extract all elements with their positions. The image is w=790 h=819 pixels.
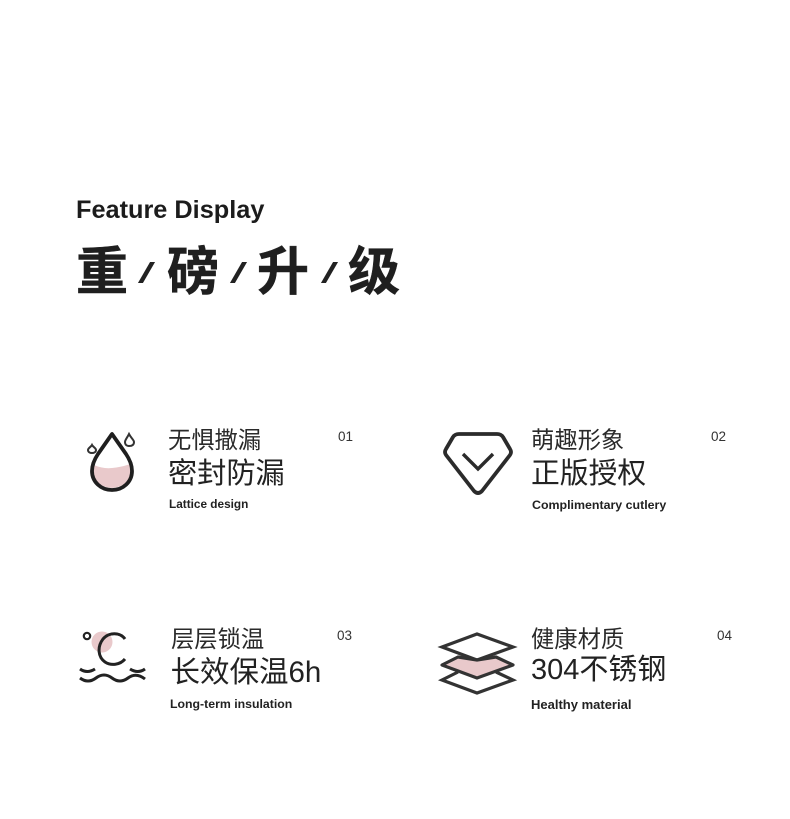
- icon: water drop: [87, 432, 135, 492]
- feature 02: licensed: [443, 427, 726, 512]
- subtitle: 萌趣形象: [531, 427, 624, 453]
- number 04: 04: [717, 628, 732, 643]
- icon: diamond badge: [443, 432, 513, 495]
- icon: temperature and waves: [79, 632, 146, 682]
- feature 04: stainless steel: [438, 626, 732, 712]
- number 01: 01: [338, 429, 353, 444]
- title: 重磅升级: 级: [348, 244, 400, 302]
- title: 重磅升级: [76, 244, 400, 302]
- main text: 304不锈钢: [531, 654, 666, 686]
- title: 重磅升级: 磅: [167, 244, 219, 302]
- title: 重磅升级: 重: [76, 244, 128, 302]
- subtitle: 无惧撒漏: [168, 427, 261, 453]
- main text: 密封防漏: [168, 458, 285, 490]
- main text: 正版授权: [531, 458, 646, 490]
- icon: stacked layers: [438, 632, 518, 695]
- title: 重磅升级: 升: [257, 244, 309, 302]
- english caption: Complimentary cutlery: [532, 498, 666, 512]
- english caption: Long-term insulation: [170, 697, 292, 711]
- number 02: 02: [711, 429, 726, 444]
- number 03: 03: [337, 628, 352, 643]
- english caption: Lattice design: [169, 497, 248, 511]
- heading: Feature Display: Feature Display: [76, 196, 264, 224]
- subtitle: 健康材质: [531, 626, 624, 652]
- feature 03: insulation: [79, 626, 352, 711]
- main text: 长效保温6h: [170, 656, 321, 689]
- english caption: Healthy material: [531, 696, 631, 712]
- feature 01: leak proof: [87, 427, 353, 511]
- subtitle: 层层锁温: [171, 626, 264, 652]
